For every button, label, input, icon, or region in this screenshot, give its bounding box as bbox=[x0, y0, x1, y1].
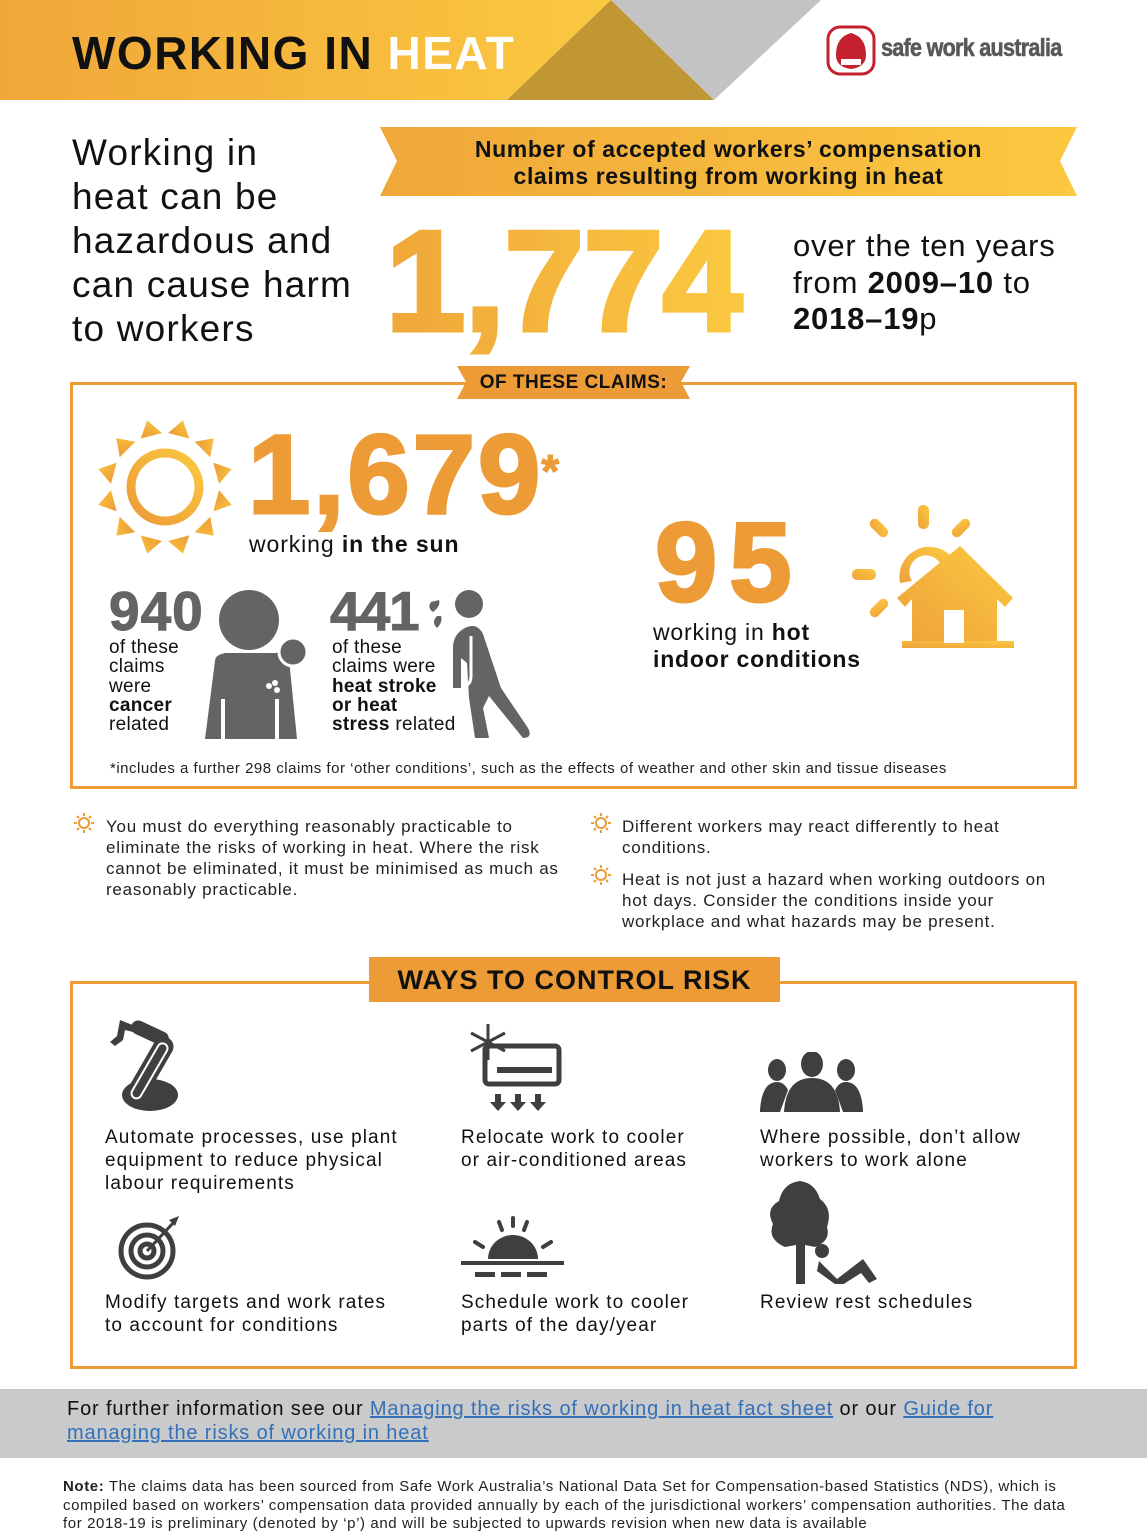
label: working in hot indoor conditions: indoor conditions bbox=[653, 646, 861, 672]
stat: 441 heat stroke: claims were bbox=[332, 656, 436, 677]
label tag: of these claims: OF THESE CLAIMS: bbox=[480, 372, 667, 393]
footnote: *includes a further 298 claims for ‘other conditions’, such as the effects of weather and other skin and tissue diseases bbox=[110, 760, 947, 777]
label: working in hot indoor conditions bbox=[653, 619, 861, 672]
further info bar bbox=[0, 1389, 1147, 1458]
icon: target bbox=[118, 1216, 179, 1280]
caption: automate: equipment to reduce physical bbox=[105, 1150, 383, 1171]
caption: rest schedules: Review rest schedules bbox=[760, 1292, 973, 1313]
intro text: heat can be bbox=[72, 176, 279, 217]
caption: schedule work: Schedule work to cooler bbox=[461, 1292, 689, 1313]
caption: relocate: Relocate work to cooler bbox=[461, 1127, 685, 1148]
period text: from 2009–10 to bbox=[793, 264, 1031, 300]
bullet column right: Different workers may react differently to heat conditions. bbox=[622, 817, 1000, 857]
stat: 441 heat stroke: 441 bbox=[330, 580, 419, 642]
stat: 441 heat stroke bbox=[330, 580, 456, 735]
intro text: to workers bbox=[72, 308, 255, 349]
icon: person with skin spot bbox=[205, 590, 306, 739]
ribbon banner: claims resulting from working in heat bbox=[514, 163, 943, 189]
title: WORKING IN HEAT bbox=[72, 27, 515, 79]
label: working in the sun: working in the sun bbox=[249, 531, 459, 557]
label: working in hot indoor conditions: working in hot bbox=[653, 619, 810, 645]
label tag: of these claims bbox=[457, 366, 690, 399]
logo: safe work australia bbox=[826, 26, 1063, 76]
icon: robot arm bbox=[110, 1020, 178, 1111]
caption: don't work alone bbox=[760, 1127, 1021, 1171]
intro text: can cause harm bbox=[72, 264, 352, 305]
intro text bbox=[72, 132, 352, 349]
intro text: Working in bbox=[72, 132, 258, 173]
label tag: ways to control risk bbox=[369, 957, 780, 1002]
label tag: ways to control risk: WAYS TO CONTROL RISK bbox=[397, 965, 752, 995]
caption: automate: labour requirements bbox=[105, 1173, 295, 1194]
icon: air conditioner bbox=[470, 1024, 562, 1111]
caption: don't work alone: workers to work alone bbox=[760, 1150, 968, 1171]
note: Note: The claims data has been sourced from Safe Work Australia’s National Data Set for Compensation-based Statistics (NDS), which is compiled based on workers’ compensation data provided annually by each of the jurisdictional workers’ compensation authorities. The data for 2018-19 is preliminary (denoted by ‘p’) and will be subjected to upwards revision when new data is available bbox=[63, 1478, 1065, 1532]
period text bbox=[793, 228, 1056, 336]
caption: don't work alone: Where possible, don’t allow bbox=[760, 1127, 1021, 1148]
stat: 940 cancer: claims bbox=[109, 656, 165, 677]
stat: 441 heat stroke: of these bbox=[332, 637, 402, 658]
bullet column right bbox=[591, 813, 1046, 931]
stat: 441 heat stroke: heat stroke bbox=[332, 676, 437, 697]
caption: automate: Automate processes, use plant bbox=[105, 1127, 398, 1148]
stat: 95 indoor: 95 bbox=[655, 500, 804, 625]
ribbon banner: Number of accepted workers’ compensation bbox=[475, 136, 982, 162]
ribbon banner bbox=[380, 127, 1077, 196]
panel: of these claims bbox=[70, 382, 1077, 789]
caption: modify targets: to account for conditions bbox=[105, 1315, 338, 1336]
icon: sun bbox=[98, 420, 232, 554]
stat: 441 heat stroke: stress related bbox=[332, 714, 456, 735]
stat: 940 cancer: cancer bbox=[109, 695, 172, 716]
logo: safe work australia: safe work australia bbox=[881, 34, 1062, 62]
period text: 2018–19p bbox=[793, 301, 937, 336]
icon: small sun bullet bbox=[74, 813, 94, 833]
stat: 940 cancer: of these bbox=[109, 637, 179, 658]
stat: 940 cancer bbox=[109, 580, 204, 735]
icon: tree and resting person bbox=[770, 1181, 877, 1284]
caption: schedule work: parts of the day/year bbox=[461, 1315, 657, 1336]
caption: schedule work bbox=[461, 1292, 689, 1336]
big number 1,774: 1,774 bbox=[386, 205, 742, 361]
further info bar: For further information see our Managing the risks of working in heat fact sheet or our Guide for managing the risks of working in heat bbox=[67, 1398, 993, 1444]
bullet column left: You must do everything reasonably practicable to eliminate the risks of working in heat. Where the risk cannot be eliminated, it must be minimised as much as reasonably practicable. bbox=[106, 817, 559, 899]
caption: relocate bbox=[461, 1127, 687, 1171]
icon: sun and house bbox=[852, 505, 1014, 648]
bullet column right: Heat is not just a hazard when working outdoors on hot days. Consider the conditions inside your workplace and what hazards may be present. bbox=[622, 870, 1046, 931]
stat: 441 heat stroke: or heat bbox=[332, 695, 397, 716]
intro text: hazardous and bbox=[72, 220, 332, 261]
caption: relocate: or air-conditioned areas bbox=[461, 1150, 687, 1171]
stat: 940 cancer: 940 bbox=[109, 580, 204, 642]
stat: 940 cancer: were bbox=[109, 676, 151, 697]
stat: 940 cancer: related bbox=[109, 714, 169, 735]
period text: over the ten years bbox=[793, 228, 1056, 263]
icon: bent figure bbox=[429, 590, 530, 738]
caption: modify targets: Modify targets and work rates bbox=[105, 1292, 386, 1313]
icon: group of people bbox=[760, 1052, 863, 1112]
header band bbox=[0, 0, 821, 100]
caption: automate bbox=[105, 1127, 398, 1194]
panel: ways to control risk bbox=[70, 981, 1077, 1369]
icon: sunrise bbox=[461, 1216, 564, 1277]
stat: 1,679: 1,679* bbox=[248, 412, 559, 537]
caption: modify targets bbox=[105, 1292, 386, 1336]
